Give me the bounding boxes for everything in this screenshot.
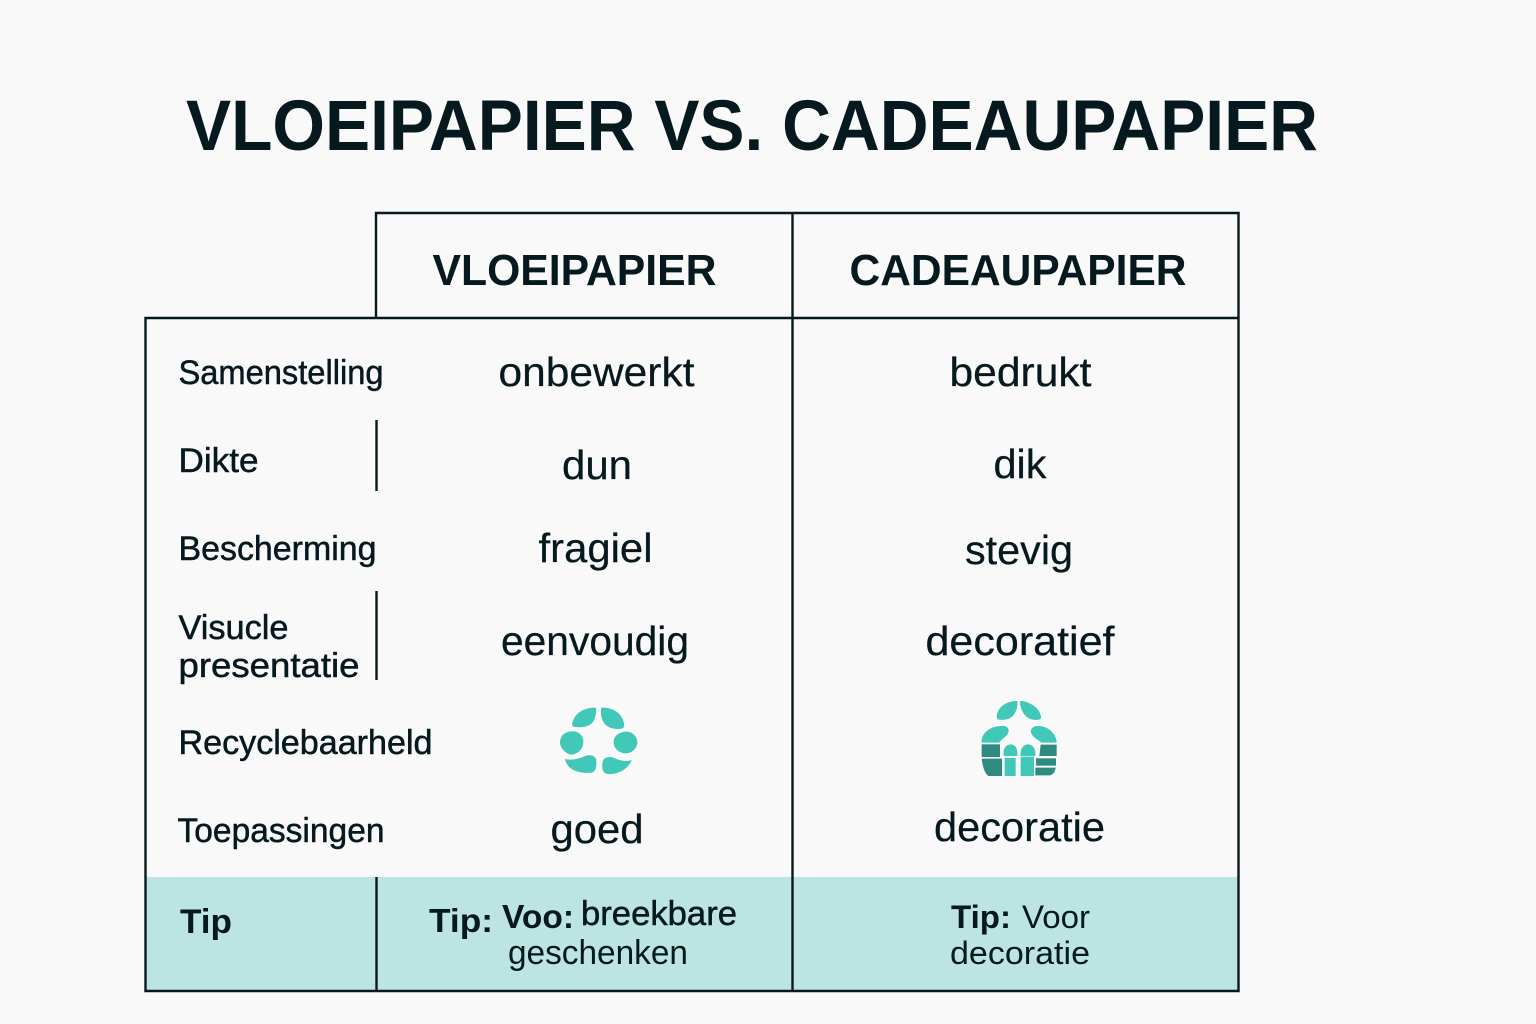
tip row background (146, 877, 1238, 991)
row labels: Visucle (178, 609, 288, 647)
vloeipapier values: goed (550, 806, 644, 852)
row labels: Bescherming (178, 530, 376, 568)
cadeaupapier values: stevig (965, 527, 1073, 573)
vloeipapier values: fragiel (538, 525, 652, 571)
tip row: label: Tip (180, 903, 232, 941)
tip row: vloeipapier: Tip: (429, 902, 493, 939)
vloeipapier values (498, 349, 695, 852)
cadeaupapier values: decoratie (934, 804, 1105, 850)
tip row: vloeipapier: breekbare (581, 895, 737, 933)
tip row: cadeaupapier: decoratie (950, 935, 1090, 971)
column header: vloeipapier: VLOEIPAPIER (432, 246, 716, 295)
tip row: vloeipapier (429, 895, 737, 972)
column header: cadeaupapier: CADEAUPAPIER (850, 246, 1186, 295)
row labels: Recyclebaarheld (178, 724, 432, 762)
row labels: Dikte (178, 442, 258, 480)
row labels: Toepassingen (178, 812, 384, 850)
vloeipapier values: eenvoudig (501, 618, 689, 664)
icon: recycling loop (560, 708, 637, 774)
cadeaupapier values: bedrukt (950, 349, 1092, 395)
icon: gift with ribbon (982, 701, 1057, 776)
cadeaupapier values: dik (994, 441, 1047, 487)
vloeipapier values: dun (562, 442, 632, 488)
tip row: cadeaupapier (950, 899, 1090, 971)
tip row: cadeaupapier: Voor (1022, 899, 1090, 935)
row labels (178, 354, 432, 850)
tip row: cadeaupapier: Tip: (951, 899, 1011, 935)
row labels: presentatie (178, 647, 360, 685)
cadeaupapier values: decoratief (926, 618, 1115, 664)
row labels: Samenstelling (178, 354, 384, 392)
tip row: vloeipapier: Voo: (502, 898, 574, 935)
tip row: vloeipapier: geschenken (508, 934, 688, 972)
cadeaupapier values (926, 349, 1115, 850)
table grid (146, 213, 1238, 991)
vloeipapier values: onbewerkt (498, 349, 695, 395)
title: VLOEIPAPIER VS. CADEAUPAPIER (186, 87, 1318, 166)
